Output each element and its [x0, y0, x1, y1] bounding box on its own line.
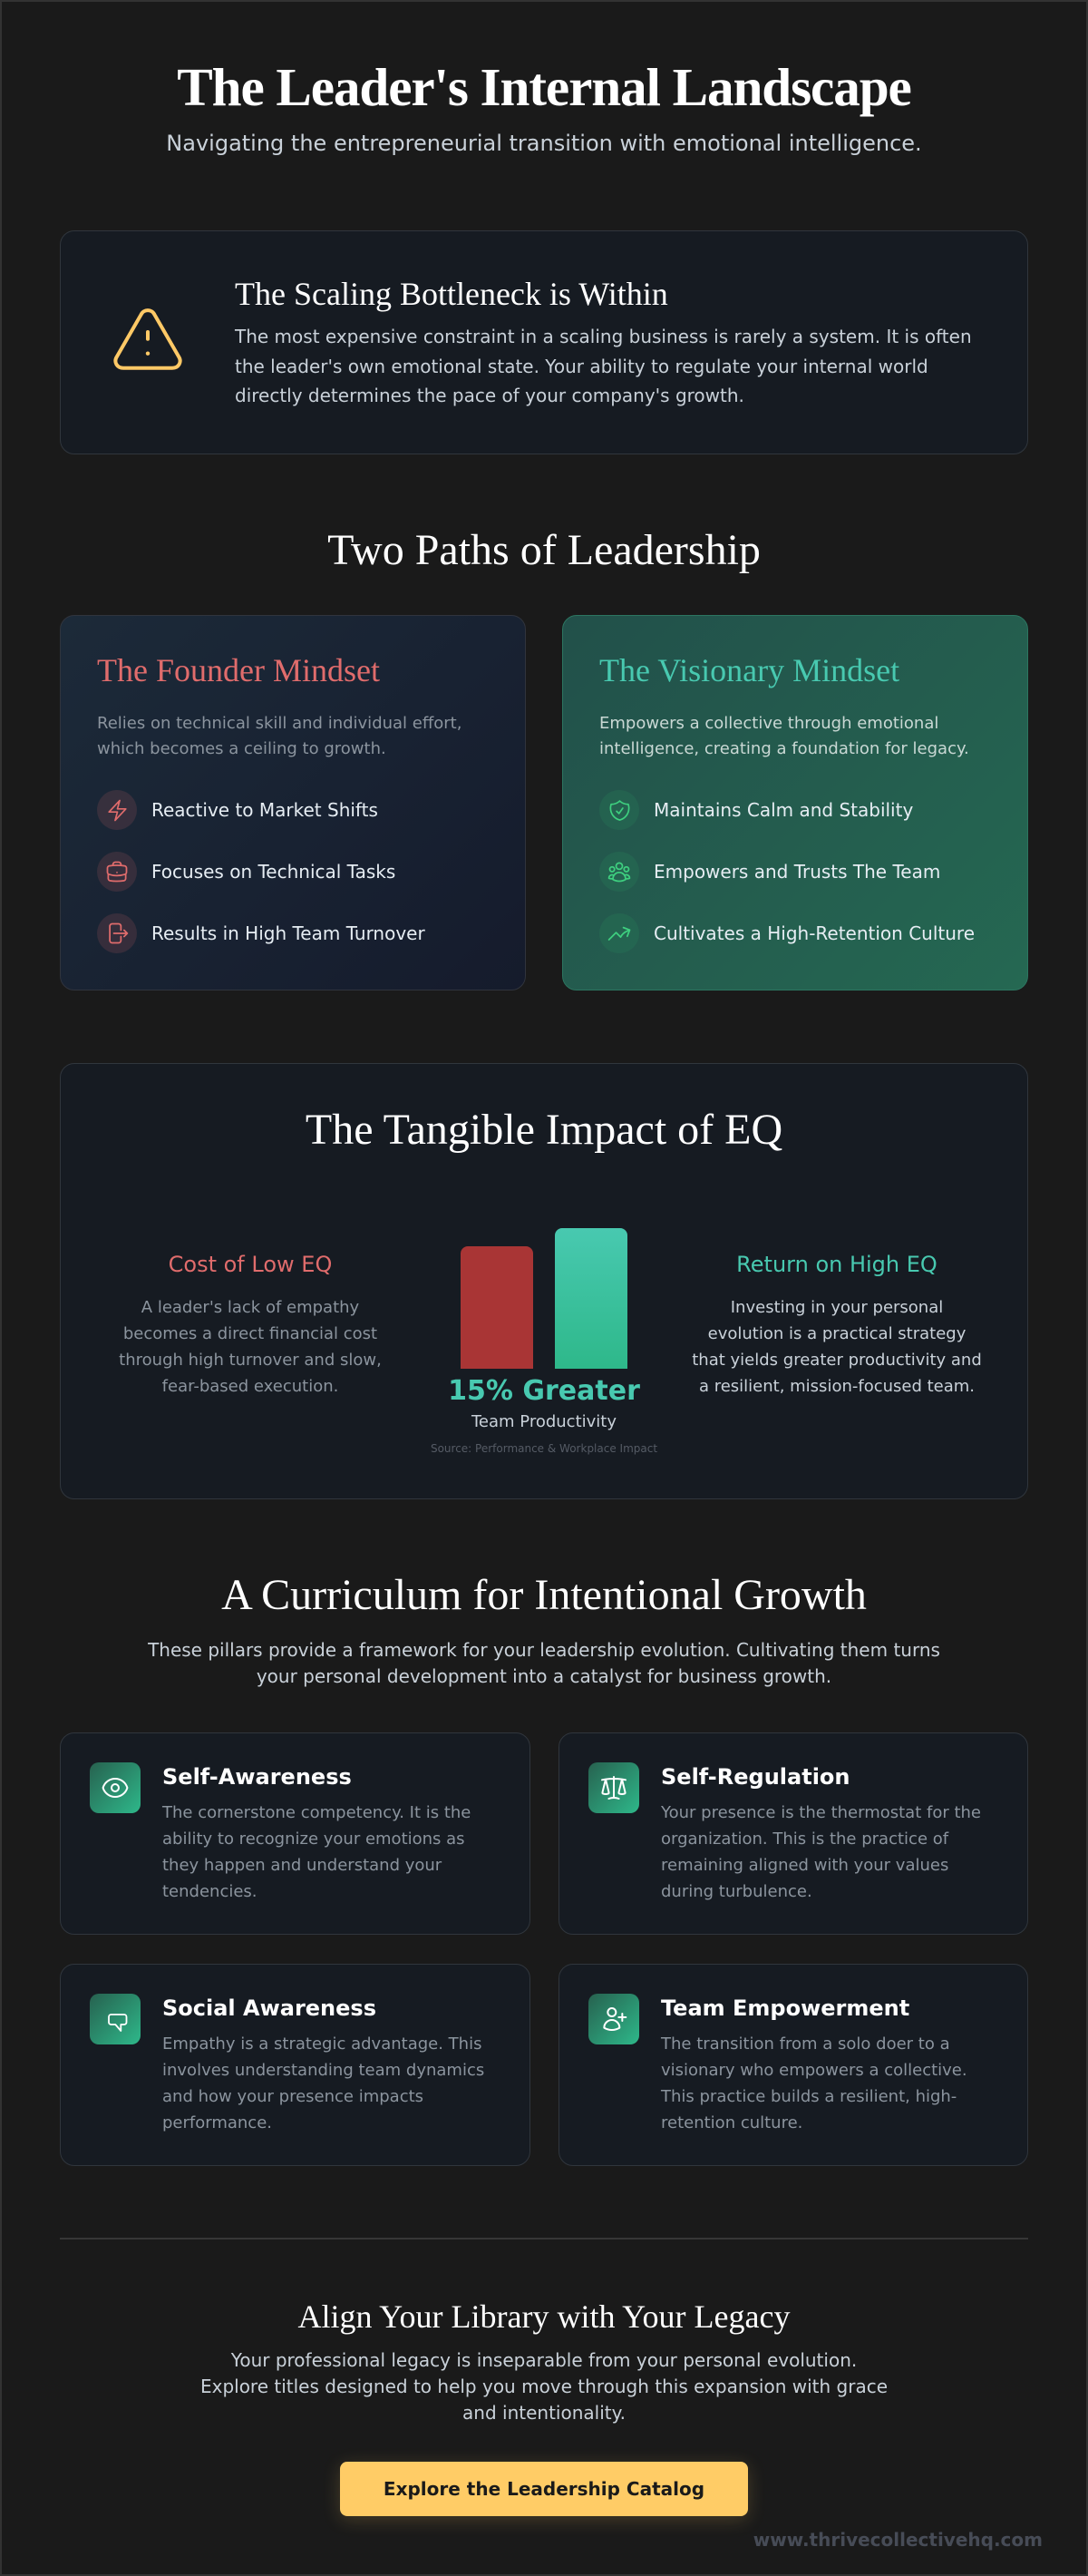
title: The Leader's Internal Landscape [177, 57, 911, 117]
card text [161, 1803, 471, 1901]
card text: ability to recognize your emotions as [162, 1830, 465, 1849]
card text: The transition from a solo doer to a [661, 2034, 950, 2054]
return heading: Return on High EQ [736, 1252, 937, 1277]
cost heading: Cost of Low EQ [169, 1252, 332, 1277]
card text: performance. [162, 2113, 272, 2132]
footer text: Explore titles designed to help you move through this expansion with grace [200, 2376, 888, 2397]
founder description [97, 714, 461, 758]
icon: shield check [599, 790, 639, 830]
card text: and how your presence impacts [162, 2087, 423, 2106]
card text [661, 1803, 981, 1901]
founder description: which becomes a ceiling to growth. [97, 739, 386, 758]
visionary item: calm [599, 790, 913, 830]
panel text: the leader's own emotional state. Your ability to regulate your internal world [235, 356, 928, 377]
panel heading: The Tangible Impact of EQ [306, 1106, 782, 1154]
curriculum intro: your personal development into a catalyst for business growth. [257, 1665, 831, 1687]
item text: Empowers and Trusts The Team [654, 861, 940, 883]
cost text: through high turnover and slow, [119, 1351, 382, 1370]
card text: involves understanding team dynamics [162, 2061, 484, 2080]
cost text [119, 1298, 382, 1396]
footer text: Your professional legacy is inseparable from your personal evolution. [231, 2349, 857, 2371]
founder description: Relies on technical skill and individual effort, [97, 714, 461, 733]
cost text: becomes a direct financial cost [123, 1324, 377, 1343]
return text: a resilient, mission-focused team. [699, 1377, 975, 1396]
stat value: 15% Greater [448, 1375, 640, 1407]
footer text: and intentionality. [462, 2402, 626, 2424]
card text [660, 2034, 967, 2132]
founder item: reactive [97, 790, 378, 830]
card text: The cornerstone competency. It is the [162, 1803, 471, 1822]
icon: warning triangle [113, 308, 182, 370]
icon: exit arrow [97, 913, 137, 953]
visionary heading: The Visionary Mindset [599, 652, 899, 688]
button: catalog [340, 2462, 748, 2516]
panel text [234, 326, 972, 406]
return text: Investing in your personal [731, 1298, 943, 1317]
curriculum intro: These pillars provide a framework for your leadership evolution. Cultivating them turns [148, 1639, 940, 1661]
curriculum intro [148, 1639, 940, 1687]
stat label: Team Productivity [471, 1412, 617, 1431]
card text: This practice builds a resilient, high- [661, 2087, 957, 2106]
card text: during turbulence. [661, 1882, 812, 1901]
heading: two paths: Two Paths of Leadership [327, 526, 761, 574]
card: team empowerment [559, 1964, 1028, 2166]
panel heading: The Scaling Bottleneck is Within [235, 276, 668, 312]
item text: Results in High Team Turnover [151, 922, 425, 944]
item text: Focuses on Technical Tasks [151, 861, 395, 883]
bar: high EQ [555, 1228, 627, 1369]
visionary description: intelligence, creating a foundation for legacy. [599, 739, 969, 758]
panel: scaling bottleneck [60, 230, 1028, 454]
card text: organization. This is the practice of [661, 1830, 948, 1849]
return text [692, 1298, 982, 1396]
card title: Self-Awareness [162, 1764, 352, 1790]
website watermark: www.thrivecollectivehq.com [753, 2529, 1043, 2551]
return text: that yields greater productivity and [692, 1351, 982, 1370]
card text: Empathy is a strategic advantage. This [162, 2034, 481, 2054]
panel text: The most expensive constraint in a scaling business is rarely a system. It is often [235, 326, 972, 347]
footer heading: Align Your Library with Your Legacy [297, 2298, 790, 2335]
card text: remaining aligned with your values [661, 1856, 948, 1875]
card text: tendencies. [162, 1882, 257, 1901]
item text: Maintains Calm and Stability [654, 799, 913, 821]
card text: Your presence is the thermostat for the [661, 1803, 981, 1822]
heading: curriculum: A Curriculum for Intentional Growth [221, 1571, 867, 1619]
panel: visionary mindset [562, 615, 1028, 990]
visionary item: culture [599, 913, 975, 953]
card: social awareness [60, 1964, 530, 2166]
card: self-regulation [559, 1732, 1028, 1935]
icon: eye [90, 1762, 141, 1813]
card text: visionary who empowers a collective. [661, 2061, 967, 2080]
icon: briefcase [97, 852, 137, 892]
founder item: technical tasks [97, 852, 395, 892]
card text: retention culture. [661, 2113, 802, 2132]
card text: they happen and understand your [162, 1856, 442, 1875]
icon: scales [588, 1762, 639, 1813]
panel text: directly determines the pace of your company's growth. [235, 385, 744, 406]
visionary item: team [599, 852, 940, 892]
bar chart: productivity [431, 1228, 657, 1455]
panel: impact of EQ [60, 1063, 1028, 1499]
cost text: A leader's lack of empathy [141, 1298, 359, 1317]
chart source: Source: Performance & Workplace Impact [431, 1442, 657, 1455]
founder heading: The Founder Mindset [97, 652, 380, 688]
icon: trending up [599, 913, 639, 953]
return column [692, 1252, 982, 1396]
icon: bolt [97, 790, 137, 830]
visionary description: Empowers a collective through emotional [599, 714, 938, 733]
subtitle: Navigating the entrepreneurial transition with emotional intelligence. [166, 131, 922, 156]
founder item: turnover [97, 913, 425, 953]
return text: evolution is a practical strategy [708, 1324, 966, 1343]
item text: Cultivates a High-Retention Culture [654, 922, 975, 944]
footer text [200, 2349, 888, 2424]
cost text: fear-based execution. [162, 1377, 338, 1396]
panel: founder mindset [60, 615, 526, 990]
card title: Self-Regulation [661, 1764, 850, 1790]
visionary description [599, 714, 969, 758]
cost column [119, 1252, 382, 1396]
card title: Social Awareness [162, 1995, 376, 2021]
card text [162, 2034, 484, 2132]
icon: user plus [588, 1994, 639, 2044]
card: self-awareness [60, 1732, 530, 1935]
card title: Team Empowerment [661, 1995, 909, 2021]
icon: chat bubble [90, 1994, 141, 2044]
bar: low EQ [461, 1246, 533, 1369]
item text: Reactive to Market Shifts [151, 799, 378, 821]
icon: user group [599, 852, 639, 892]
button: catalog: Explore the Leadership Catalog [384, 2478, 704, 2500]
